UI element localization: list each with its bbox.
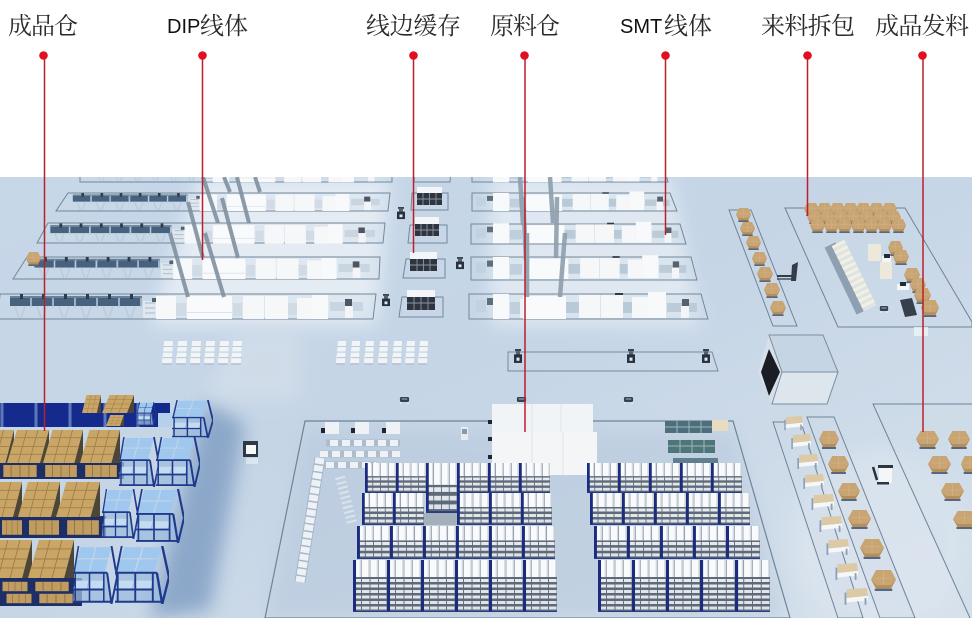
leader line (198, 51, 207, 260)
small AGV (461, 427, 468, 440)
hand pallet truck (777, 262, 798, 281)
SMT line row 4 (476, 255, 686, 279)
white equipment group middle (336, 341, 428, 365)
white equipment group left (162, 341, 242, 365)
DIP overhead pipes (170, 177, 260, 297)
cube top (769, 335, 838, 372)
label: 线边缓存 (366, 6, 461, 41)
floor lighting and shadows (150, 177, 970, 618)
green shelving (665, 420, 728, 463)
callout: incoming unpacking (761, 6, 855, 216)
incoming carton grid (804, 203, 906, 233)
label: 来料拆包 (761, 6, 855, 41)
forklift AGV right (873, 465, 893, 484)
kitting pallets (785, 416, 868, 605)
unpacking zone plate (785, 208, 972, 327)
panel: raw material warehouse (265, 404, 790, 618)
panel: kitting and outgoing lanes (773, 404, 972, 618)
buffer plates (399, 170, 451, 317)
pallet rack block A (353, 463, 557, 612)
DIP line row 4 (34, 257, 370, 279)
SMT line row 2 (476, 192, 670, 211)
sorting conveyor (300, 443, 400, 582)
label: 成品仓 (8, 6, 78, 41)
carton rack row 3 (0, 482, 184, 543)
navy back rack row (0, 395, 213, 438)
picking robots (321, 422, 400, 434)
panel: central aisle equipment (162, 341, 718, 403)
cube left side (758, 335, 782, 404)
leader line (803, 51, 812, 216)
carton on DIP line (26, 252, 41, 266)
unpacking stations (830, 243, 870, 312)
kitting lane plates (773, 417, 915, 618)
dispatch cartons (916, 431, 972, 529)
leader line (918, 51, 927, 432)
DIP line row 5 (10, 294, 363, 319)
panel: central cube building (758, 335, 838, 404)
AGV parking plate (508, 352, 718, 371)
label: 线体 (200, 6, 248, 41)
leader line (39, 51, 48, 431)
callout: line-side buffer (366, 6, 461, 253)
SMT line row 3 (476, 222, 678, 244)
carton lane plate (729, 210, 797, 326)
panel: SMT production lines (469, 165, 708, 319)
cube front (772, 372, 838, 404)
white header band (0, 0, 972, 177)
SMT overhead pipes (520, 177, 565, 297)
buffer rack 3 (410, 252, 437, 271)
label: DIP (167, 16, 200, 38)
cube door (761, 349, 780, 396)
white storage towers (488, 404, 597, 475)
AGVs in parking plate (514, 349, 710, 363)
callout: raw material warehouse (490, 6, 560, 432)
panel: incoming unpacking zone (729, 203, 972, 336)
carton rack row 4 (0, 540, 169, 606)
SMT line row 5 (476, 292, 697, 319)
carton lane cartons (736, 208, 786, 316)
floor background (0, 177, 972, 618)
callout: DIP line (167, 6, 248, 260)
panel: line-side buffer racks (382, 170, 464, 317)
carton rack row 2 (0, 430, 200, 487)
callout: finished goods dispatch (875, 6, 969, 432)
pallet rack block B (587, 463, 770, 612)
buffer vehicles (382, 207, 464, 306)
robot cells and cartons (868, 241, 939, 336)
DIP line row 2 (73, 193, 380, 211)
buffer rack 4 (407, 290, 435, 310)
callout: finished goods warehouse (8, 6, 78, 431)
DIP line row 1 (93, 166, 383, 182)
label: 成品发料 (875, 6, 969, 41)
label: 线体 (664, 6, 712, 41)
buffer rack 2 (415, 217, 439, 236)
SMT plates (469, 170, 708, 319)
warehouse floor plate (265, 421, 790, 618)
SMT line row 1 (476, 165, 664, 182)
panel: DIP production lines (0, 166, 392, 319)
DIP line row 3 (50, 224, 375, 244)
DIP line plates (0, 170, 392, 319)
small robots on the aisle (400, 397, 633, 403)
buffer rack 1 (417, 187, 442, 205)
label: 原料仓 (490, 6, 560, 41)
panel: finished goods warehouse (0, 395, 258, 606)
forklift AGV (243, 441, 258, 464)
leader line (661, 51, 670, 235)
callout: SMT line (620, 6, 712, 235)
kitting lane cartons (819, 431, 896, 591)
label: SMT (620, 16, 662, 38)
finished goods dispatch plate (873, 404, 972, 618)
leader line (520, 51, 529, 432)
leader line (409, 51, 418, 253)
